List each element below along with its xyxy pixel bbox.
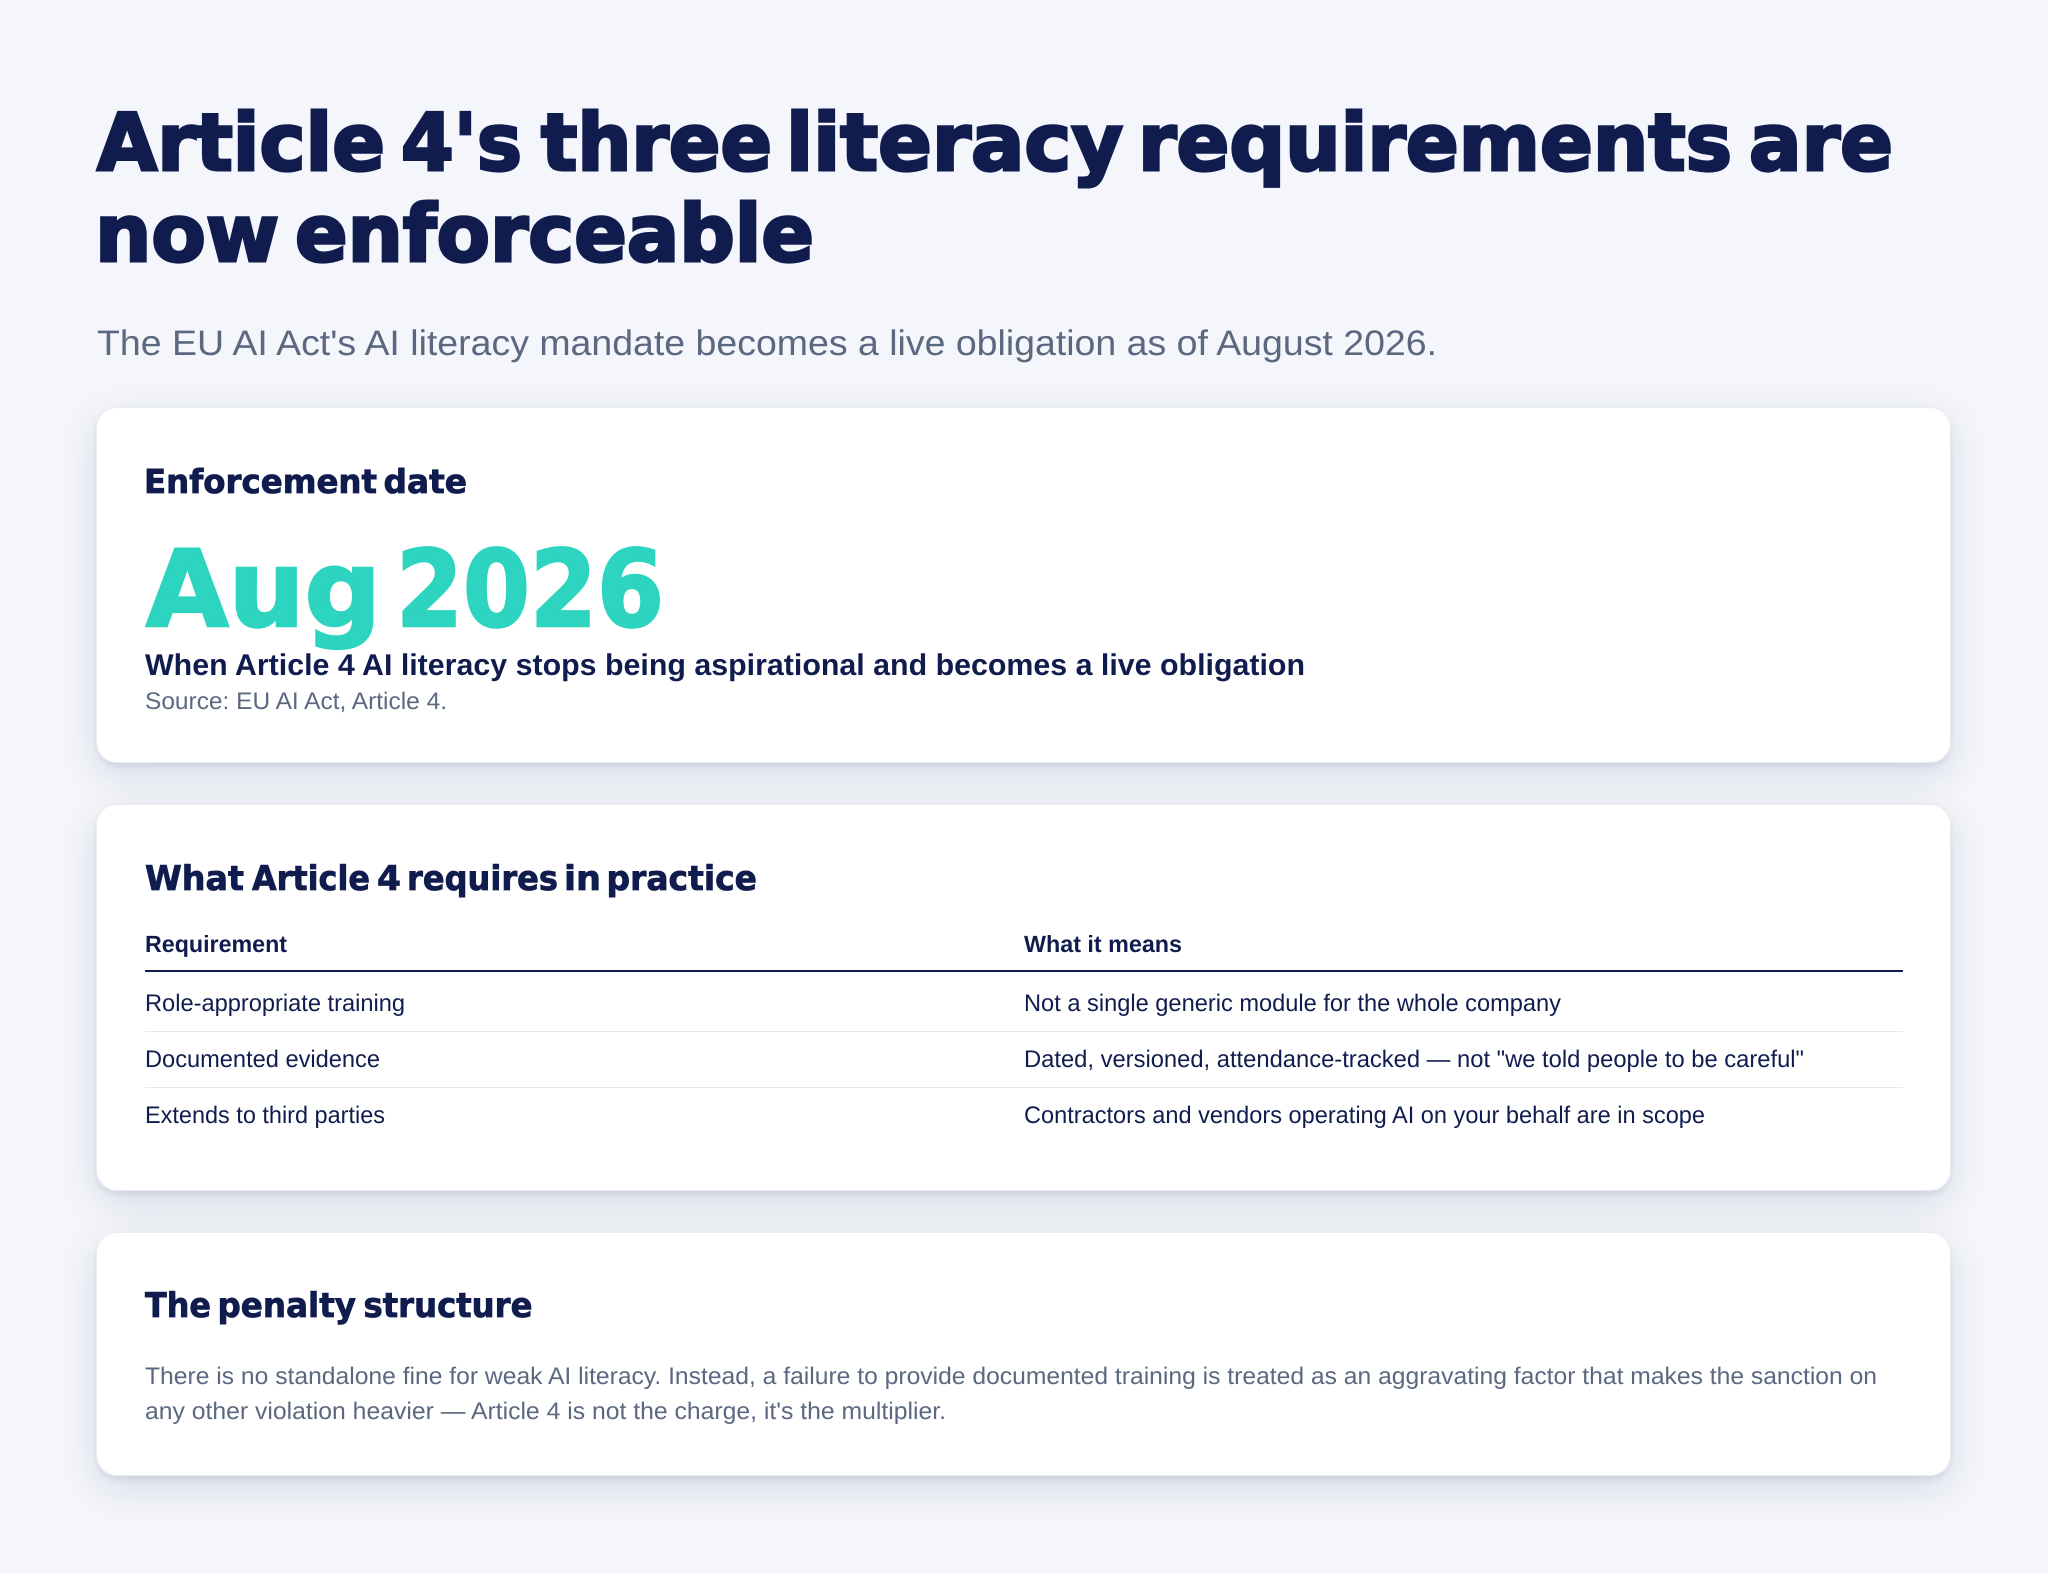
title <box>95 97 1893 280</box>
stat description: When Article 4 AI literacy stops being aspirational and becomes a live obligation <box>145 649 1305 682</box>
heading: requirements: requires <box>407 859 558 899</box>
title: three <box>541 97 772 189</box>
penalty body text <box>145 1363 1877 1425</box>
title: 4's <box>401 97 522 189</box>
table row: extends to third parties <box>145 1102 1705 1129</box>
table row: role-appropriate training: Not a single generic module for the whole company <box>1024 990 1561 1017</box>
heading: penalty structure <box>145 1286 532 1326</box>
table row: extends to third parties: Contractors and vendors operating AI on your behalf are in scope <box>1024 1102 1705 1129</box>
source note: Source: EU AI Act, Article 4. <box>145 688 447 715</box>
table row: role-appropriate training <box>145 990 1561 1017</box>
heading: penalty structure: The <box>145 1286 211 1326</box>
page header <box>95 97 1893 363</box>
panel: the penalty structure <box>96 1232 1951 1476</box>
big stat: Aug 2026: Aug <box>146 528 381 651</box>
subtitle: The EU AI Act's AI literacy mandate becomes a live obligation as of August 2026. <box>97 323 1437 363</box>
title: now <box>95 188 279 280</box>
table row: documented evidence: Documented evidence <box>145 1046 380 1073</box>
heading: requirements: practice <box>606 859 757 899</box>
title: enforceable <box>295 188 814 280</box>
title: literacy <box>786 97 1123 189</box>
table: requirements <box>145 931 1903 1129</box>
heading: enforcement date: Enforcement <box>144 462 377 501</box>
heading: requirements: Article <box>252 859 370 899</box>
table row: documented evidence: Dated, versioned, attendance-tracked — not "we told people to be careful" <box>1024 1046 1804 1073</box>
penalty body text: There is no standalone fine for weak AI literacy. Instead, a failure to provide documented training is treated as an aggravating factor that makes the sanction on <box>145 1363 1877 1390</box>
heading: penalty structure: structure <box>364 1286 532 1326</box>
heading: requirements: What <box>145 859 244 899</box>
title: requirements <box>1138 97 1732 189</box>
table row: documented evidence <box>145 1046 1804 1073</box>
table row: extends to third parties: Extends to third parties <box>145 1102 385 1129</box>
heading: penalty structure: penalty <box>218 1286 356 1326</box>
heading: requirements: in <box>564 859 601 899</box>
panel: enforcement date <box>96 407 1951 763</box>
table header row <box>145 931 1182 957</box>
table row: role-appropriate training: Role-appropriate training <box>145 990 405 1017</box>
penalty body text: any other violation heavier — Article 4 is not the charge, it's the multiplier. <box>145 1398 946 1425</box>
table header row: What it means <box>1024 931 1182 957</box>
heading: requirements <box>145 859 757 899</box>
heading: enforcement date: date <box>384 462 467 501</box>
panel: what Article 4 requires in practice <box>96 804 1951 1191</box>
big stat: Aug 2026: 2026 <box>396 528 664 651</box>
title: are <box>1749 97 1893 189</box>
big stat: Aug 2026 <box>146 528 664 651</box>
title: Article <box>97 97 385 189</box>
heading: requirements: 4 <box>377 859 401 899</box>
table header row: Requirement <box>145 931 287 957</box>
